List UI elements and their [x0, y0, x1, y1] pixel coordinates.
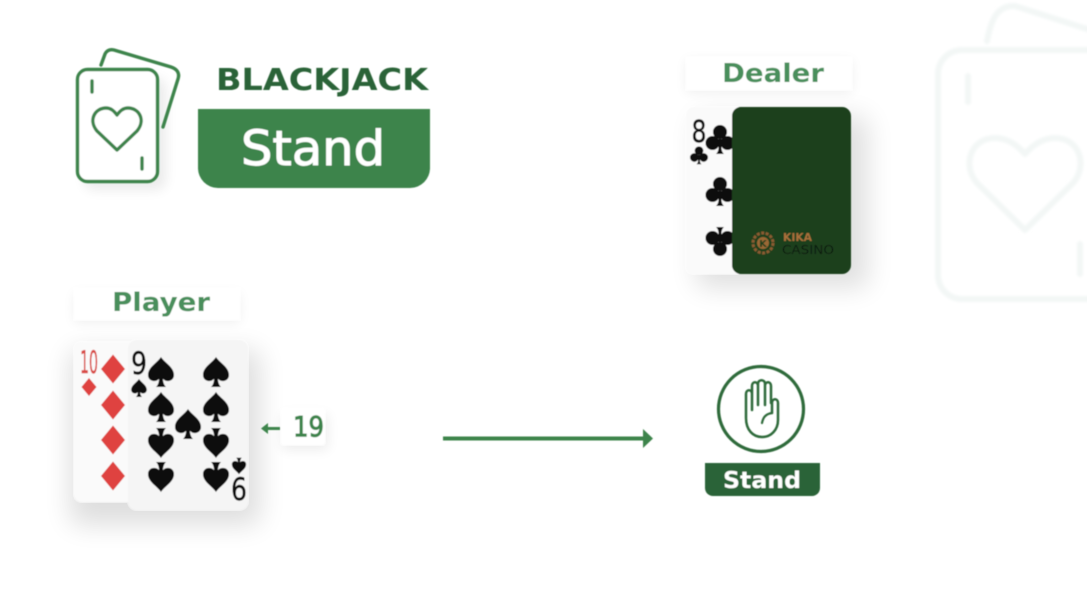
total callout: 19 [261, 408, 328, 450]
title banner: Stand [198, 109, 430, 188]
dealer label: Dealer [722, 59, 824, 89]
casino logo: KIKA [783, 231, 812, 244]
panel: dealer [686, 57, 868, 288]
action label: Stand: Stand [723, 468, 801, 494]
icon: stand hand in circle [718, 366, 804, 452]
total callout: 19: 19 [293, 410, 324, 443]
player label: Player [112, 288, 210, 318]
panel: player [70, 288, 328, 525]
arrow: hand to action [443, 429, 653, 448]
player card: 9 of spades: 9 [131, 346, 147, 382]
watermark card icon [938, 6, 1087, 299]
logo icon: playing cards with heart [78, 50, 179, 190]
casino logo: K [759, 239, 768, 250]
player card: 9 of spades [128, 340, 248, 510]
dealer label [686, 57, 852, 93]
casino logo [753, 231, 834, 257]
dealer face-up card: 8 of clubs: 8 [692, 115, 706, 150]
title banner: Stand: Stand [241, 121, 385, 177]
heading: BLACKJACK: BLACKJACK [216, 63, 430, 98]
dealer face-up card: 8 of clubs [686, 107, 746, 274]
player card: 9 of spades: 6 [231, 472, 247, 508]
player label [74, 288, 240, 323]
action label: Stand [705, 463, 820, 496]
dealer face-down card [732, 107, 851, 274]
player card: 10 of diamonds [74, 342, 154, 502]
player card: 10 of diamonds: 10 [80, 345, 98, 381]
casino logo: CASINO [782, 243, 834, 257]
